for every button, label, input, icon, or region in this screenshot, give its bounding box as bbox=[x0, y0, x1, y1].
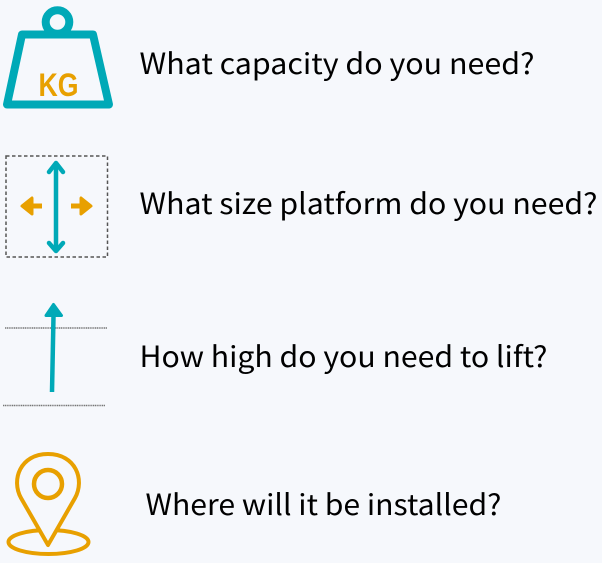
icon: weight bbox=[7, 10, 109, 105]
text: installation question: Where will it be installed? bbox=[146, 482, 502, 524]
text: capacity question: What capacity do you need? bbox=[140, 41, 534, 83]
icon: platform size bbox=[6, 156, 108, 257]
icon: weight: KG bbox=[38, 67, 78, 103]
icon: lift height bbox=[3, 304, 107, 406]
text: platform question: What size platform do you need? bbox=[140, 181, 598, 223]
icon: location pin bbox=[8, 454, 88, 554]
text: lift question: How high do you need to lift? bbox=[140, 334, 548, 376]
